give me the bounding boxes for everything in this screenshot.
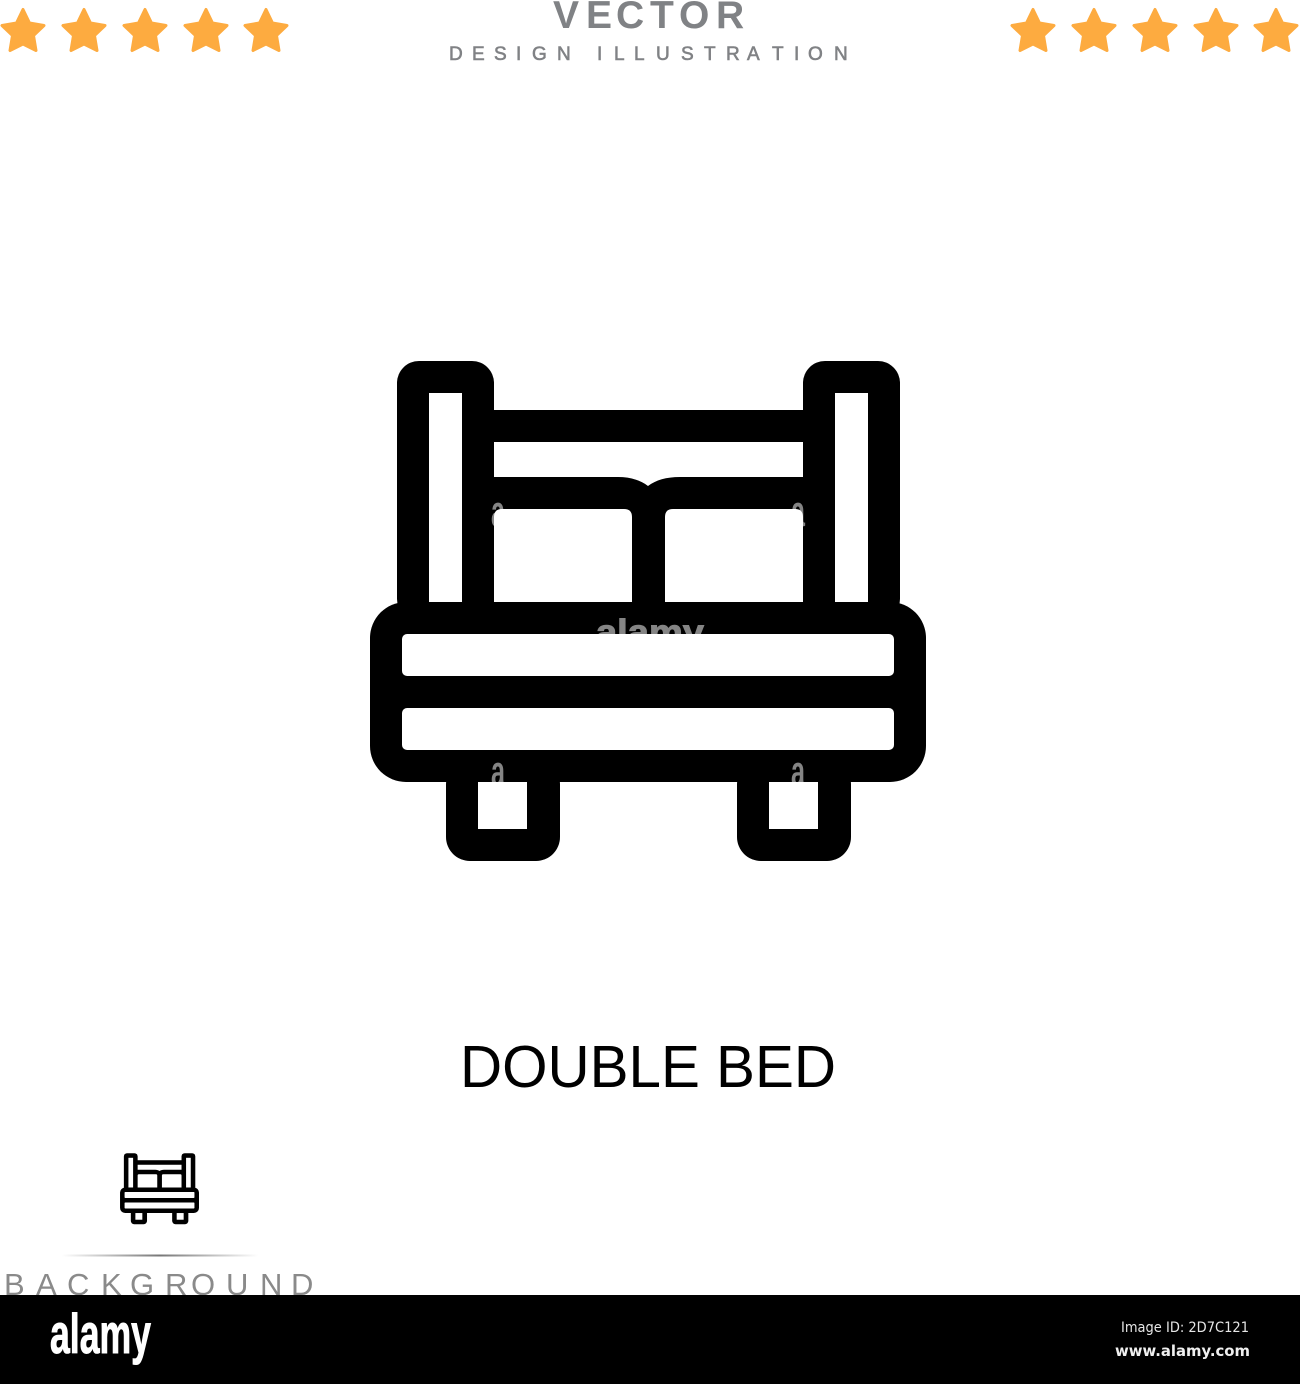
footer bar	[0, 1295, 1300, 1384]
title: double bed: DOUBLE BED	[460, 1034, 836, 1100]
watermark letters	[491, 487, 805, 796]
label: background: BACKGROUND	[4, 1267, 313, 1302]
divider line	[62, 1254, 258, 1256]
right star rating	[1012, 10, 1297, 50]
watermark letters: a	[791, 487, 805, 536]
footer image id: Image ID: 2D7C121	[1121, 1320, 1249, 1336]
watermark letters: a	[491, 487, 505, 536]
watermark letters: a	[491, 747, 505, 796]
watermark letters: alamy	[596, 613, 705, 652]
icon: small double bed	[120, 1153, 199, 1224]
footer logo: alamy: alamy	[50, 1302, 151, 1365]
icon: double bed	[370, 361, 926, 861]
left star rating	[2, 10, 287, 50]
subheading: design illustration: DESIGN ILLUSTRATION	[449, 44, 848, 65]
footer url: www.alamy.com	[1115, 1342, 1250, 1360]
watermark letters: a	[791, 747, 805, 796]
